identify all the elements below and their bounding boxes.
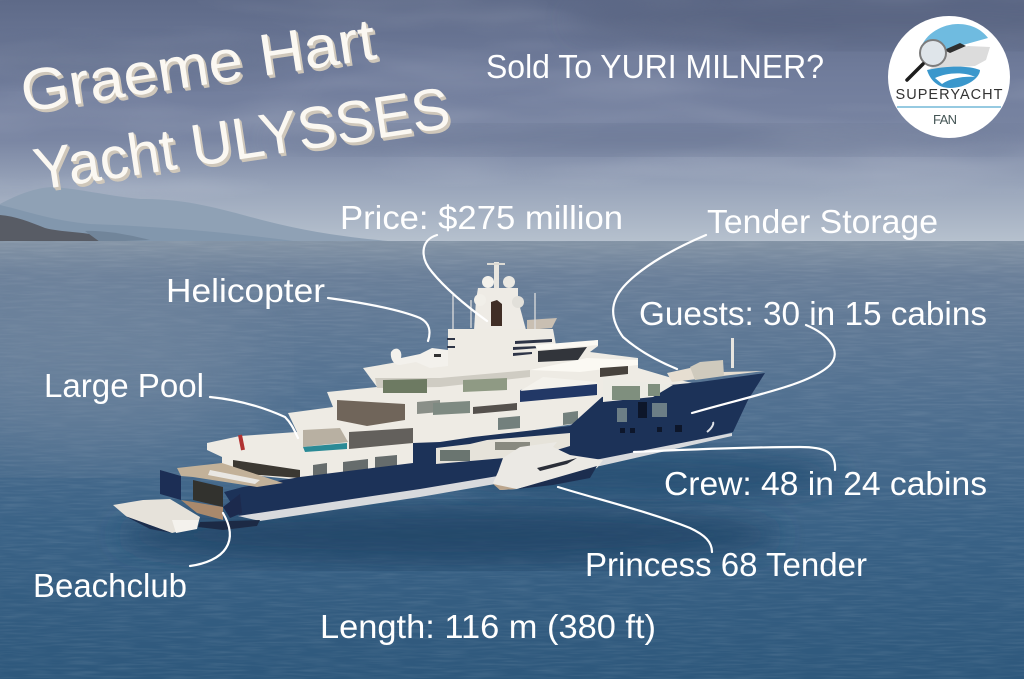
logo icon: magnifying glass: [907, 40, 946, 80]
leader: helicopter: [328, 298, 429, 341]
title line 2: Yacht ULYSSES: [29, 75, 454, 203]
label: large pool: Large Pool: [44, 367, 204, 404]
logo: Superyacht Fan: [888, 16, 1010, 138]
leader: price: [424, 235, 487, 321]
yacht: stern beach club: [160, 435, 283, 520]
yacht: navy hull: [224, 338, 765, 521]
background: cloudy sky: [0, 0, 1024, 242]
label: princess tender: Princess 68 Tender: [585, 546, 867, 583]
label: length: Length: 116 m (380 ft): [320, 608, 656, 645]
logo text: superyacht: SUPERYACHT: [896, 87, 1003, 103]
label: guests: Guests: 30 in 15 cabins: [639, 295, 987, 332]
title line 1: Graeme Hart: [16, 6, 380, 125]
leader: crew: [634, 447, 835, 470]
yacht: window bands: [233, 338, 638, 478]
background: distant mountains: [0, 187, 400, 245]
label: helicopter: Helicopter: [166, 272, 325, 309]
leader: princess tender: [558, 487, 712, 552]
background: sea: [0, 241, 1024, 679]
yacht: mast and radar domes: [453, 262, 557, 330]
leader: beachclub: [190, 513, 230, 566]
title: [16, 6, 454, 203]
leader lines: [190, 235, 835, 566]
label: beachclub: Beachclub: [33, 567, 187, 604]
logo icon: sky, boat and waves: [920, 24, 990, 88]
label: price: Price: $275 million: [340, 199, 623, 236]
label: crew: Crew: 48 in 24 cabins: [664, 465, 987, 502]
leader: tender storage: [613, 235, 706, 369]
helicopter on upper deck: [391, 348, 448, 368]
yacht ULYSSES: [113, 262, 765, 533]
Princess 68 tender: [493, 442, 603, 490]
logo text: fan: FAN: [933, 112, 957, 127]
label: sold to: Sold To YURI MILNER?: [486, 48, 824, 85]
yacht: white superstructure mass: [207, 329, 700, 480]
leader: large pool: [210, 397, 298, 438]
stern speedboat tender: [113, 499, 260, 533]
label: tender storage: Tender Storage: [707, 203, 938, 240]
leader: guests: [692, 325, 835, 413]
